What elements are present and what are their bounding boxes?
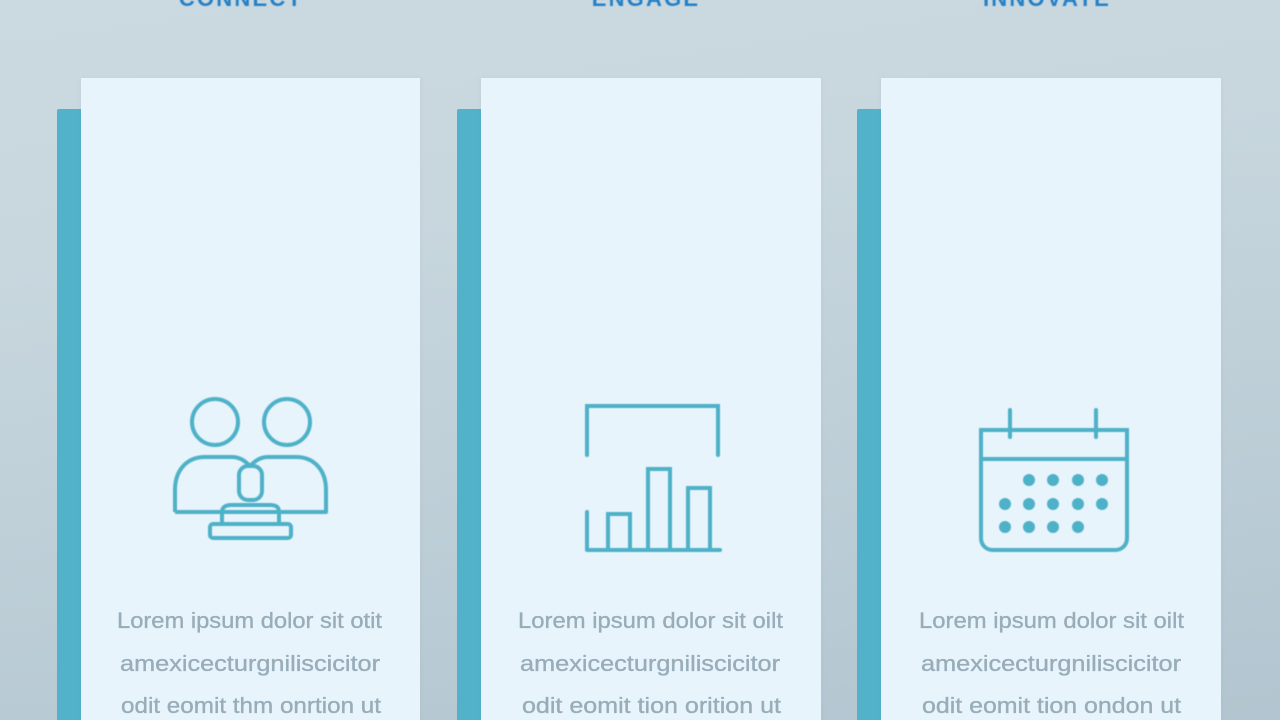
description: connect xyxy=(117,608,382,718)
description: innovate xyxy=(919,608,1184,718)
accent bar: innovate xyxy=(857,109,881,720)
description: connect: odit eomit thm onrtion ut xyxy=(121,693,381,718)
description: engage: Lorem ipsum dolor sit oilt xyxy=(518,608,783,633)
description: engage xyxy=(518,608,783,718)
card: connect xyxy=(81,78,420,720)
panel: connect xyxy=(57,78,420,720)
card: engage xyxy=(481,78,821,720)
card: innovate xyxy=(881,78,1221,720)
description: innovate: odit eomit tion ondon ut xyxy=(922,693,1181,718)
icon: calendar xyxy=(978,407,1130,553)
icon: bar chart in bracket xyxy=(584,403,723,553)
description: innovate: amexicecturgniliscicitor xyxy=(921,651,1181,676)
description: connect: Lorem ipsum dolor sit otit xyxy=(117,608,382,633)
icon: two people at a desk xyxy=(172,396,329,541)
description: connect: amexicecturgniliscicitor xyxy=(120,651,380,676)
description: engage: amexicecturgniliscicitor xyxy=(520,651,780,676)
description: engage: odit eomit tion orition ut xyxy=(522,693,781,718)
panel: engage xyxy=(457,78,821,720)
description: innovate: Lorem ipsum dolor sit oilt xyxy=(919,608,1184,633)
panel: innovate xyxy=(857,78,1221,720)
accent bar: engage xyxy=(457,109,481,720)
accent bar: connect xyxy=(57,109,81,720)
